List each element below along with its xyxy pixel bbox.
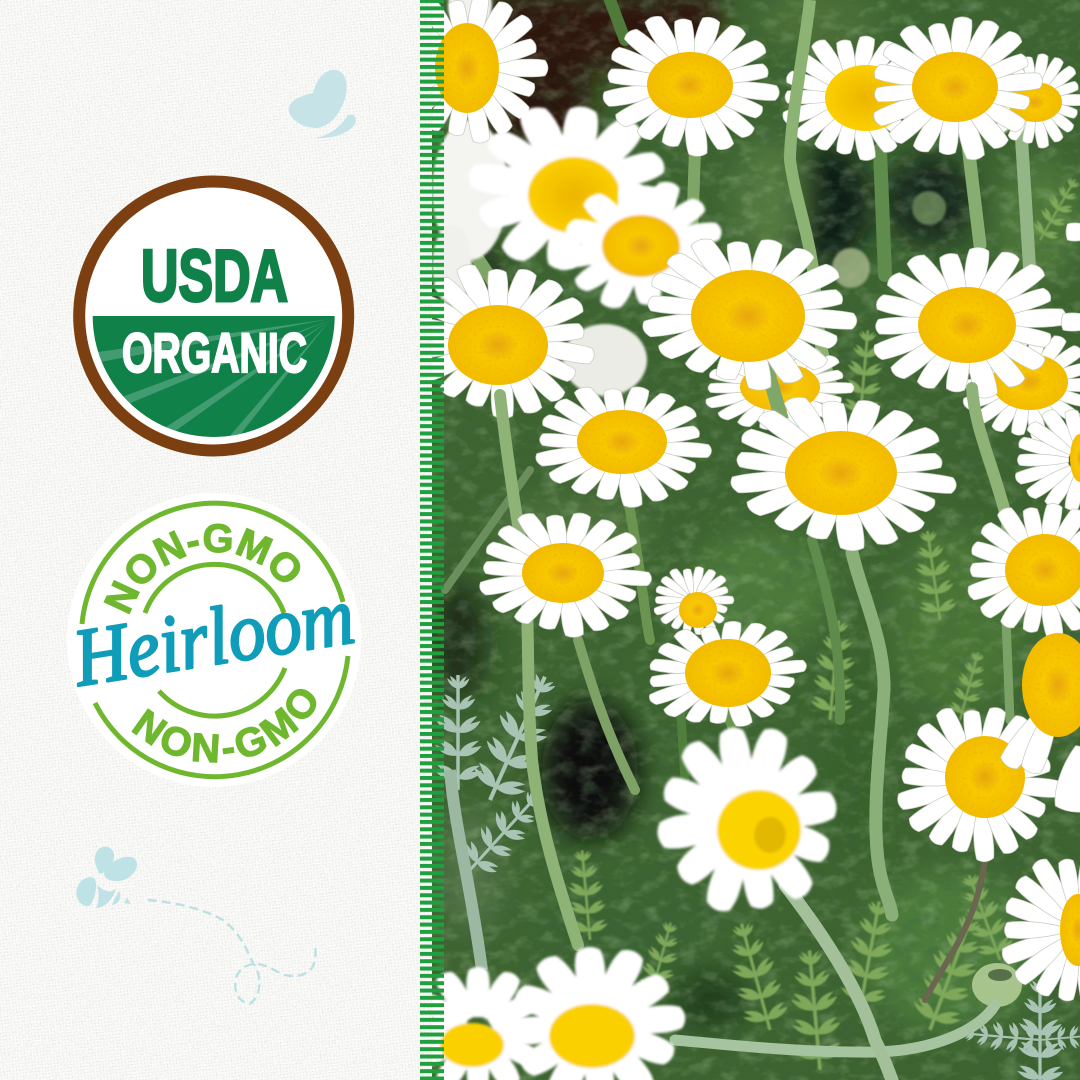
- decorative green stripe band: [420, 0, 444, 1080]
- stem: tall wavy: [790, 0, 835, 395]
- flower: top centre: [602, 16, 780, 157]
- badge: Heirloom Non-GMO stamp: [66, 493, 361, 787]
- NON-GMO upper text: NON-GMO: [104, 524, 300, 614]
- USDA wordmark: USDA: [141, 236, 288, 317]
- flower: back right: [961, 330, 1080, 442]
- flower: lower right: [897, 707, 1058, 862]
- icon: bee with dashed flight path: [76, 847, 316, 1004]
- photo: chamomile flowers: [390, 0, 1080, 1080]
- flower: right large: [874, 247, 1066, 398]
- flower: small bud flower: [653, 566, 734, 635]
- flower: back mid: [706, 348, 854, 430]
- flower: top left: [432, 0, 548, 144]
- stems: foreground: [500, 388, 1008, 1080]
- flower: centre large: [635, 228, 863, 400]
- flower: bottom centre soft: [513, 945, 688, 1080]
- flower: right: [966, 502, 1080, 641]
- flower: soft middle: [564, 180, 724, 310]
- flower: right edge small: [1015, 409, 1080, 510]
- flower: lower centre big soft: [656, 726, 838, 914]
- flower: top right: [874, 16, 1043, 160]
- bud: [972, 963, 1022, 1007]
- background stems: [445, 0, 1030, 1000]
- flower: middle: [536, 386, 712, 508]
- petals: right edge: [1061, 223, 1080, 331]
- badge: USDA Organic seal: [79, 182, 348, 450]
- flower: back top right: [782, 36, 908, 161]
- flower: back left cluster blurred: [432, 0, 647, 396]
- Heirloom script: Heirloom: [66, 570, 360, 704]
- pale silver leaf sprays: [433, 664, 1080, 1080]
- flower: far top right: [985, 53, 1080, 149]
- NON-GMO lower text: NON-GMO: [131, 688, 316, 763]
- foliage background: [432, 0, 1080, 1080]
- flower: bottom left soft: [432, 966, 550, 1080]
- fern foliage: [563, 78, 1080, 1072]
- seal field with sun rays: [93, 316, 335, 440]
- flower: bottom right edge: [1002, 858, 1080, 1002]
- white sticker backing: [67, 493, 361, 787]
- ORGANIC wordmark: ORGANIC: [122, 321, 307, 384]
- flower: mid centre: [649, 620, 807, 727]
- stamp rings: [82, 503, 348, 777]
- seal ring: [79, 182, 348, 450]
- flower: right edge large yellow: [998, 633, 1080, 815]
- icon: butterfly: [289, 70, 356, 138]
- panel: linen fabric background: [0, 0, 432, 1080]
- flower: centre right largest: [730, 396, 957, 551]
- flower: mid left: [479, 512, 652, 638]
- flower: left large: [432, 264, 594, 418]
- flower: soft back: [469, 104, 678, 272]
